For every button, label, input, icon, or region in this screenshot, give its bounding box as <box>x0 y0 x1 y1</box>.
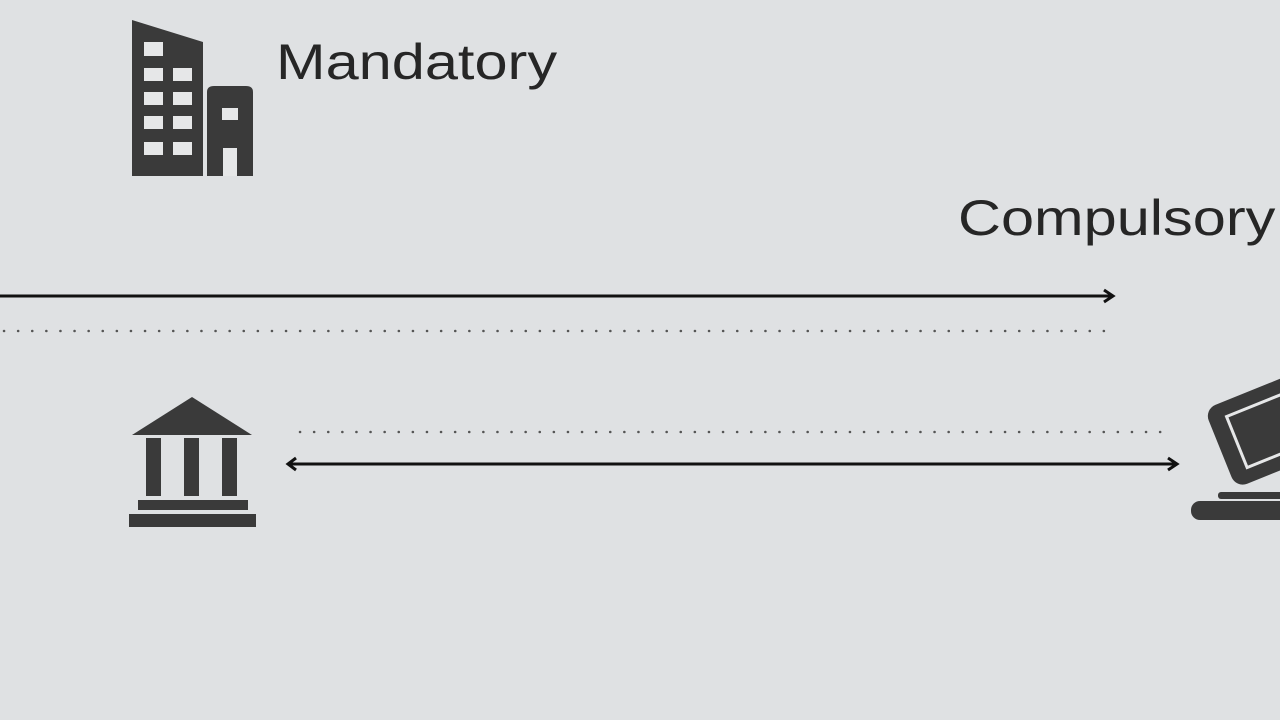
title: Mandatory: Mandatory <box>276 34 557 90</box>
icon: institution <box>129 397 256 527</box>
title: Compulsory: Compulsory <box>958 190 1275 246</box>
arrow: double <box>288 458 1177 470</box>
icon: buildings <box>132 20 253 176</box>
icon: gavel <box>1191 374 1280 520</box>
arrow: top <box>0 290 1113 302</box>
